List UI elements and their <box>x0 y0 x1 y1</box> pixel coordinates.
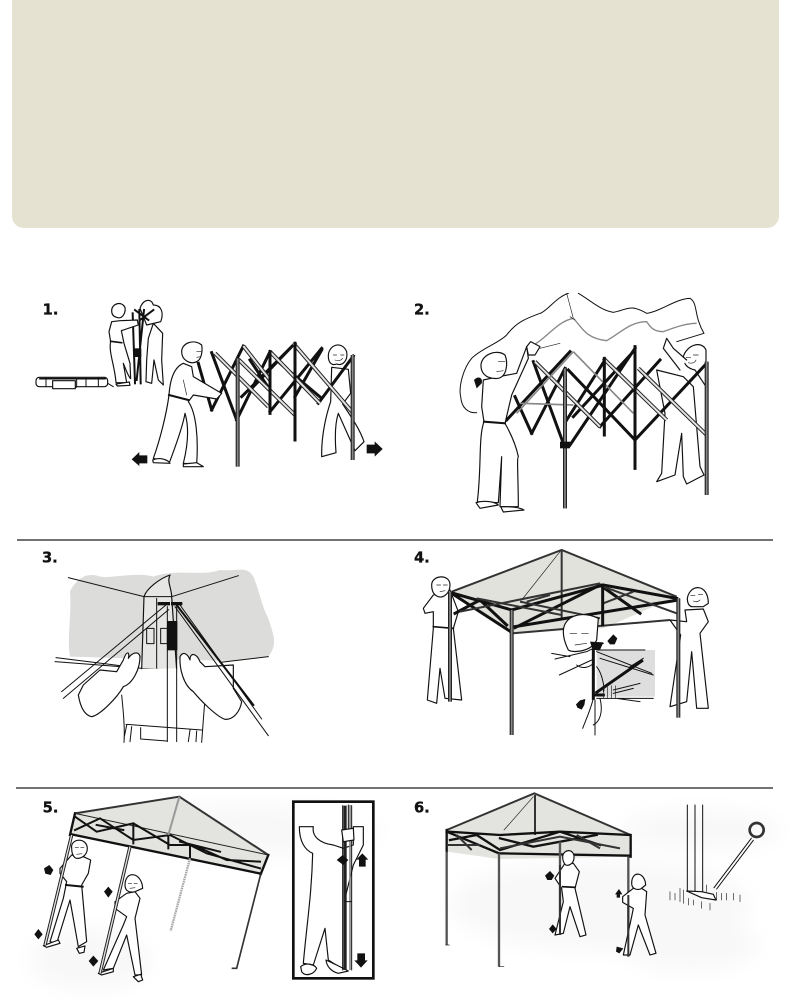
folded canopy bag <box>36 377 113 389</box>
step 1 illustration: unfolding the frame <box>36 300 383 467</box>
canopy roof <box>452 550 677 633</box>
divider between rows two and three <box>16 787 773 789</box>
right arm and hand <box>180 653 242 719</box>
man at left <box>423 577 462 703</box>
man in foreground <box>474 342 540 512</box>
woman pulling frame right <box>322 345 364 457</box>
step 4 illustration: raising canopy sides <box>414 549 708 735</box>
woman lifting middle leg <box>98 875 143 982</box>
left pole <box>45 835 72 945</box>
step number 1: 1. <box>43 302 58 319</box>
folded frame with two people <box>109 300 163 386</box>
middle pole <box>100 847 130 973</box>
expanded frame <box>450 583 678 735</box>
scissor frame <box>198 343 353 467</box>
man lifting left leg <box>43 840 91 953</box>
step 6 illustration: finishing and staking <box>414 793 764 967</box>
man pulling frame left <box>153 342 222 467</box>
right diagonal brace <box>175 605 268 736</box>
step 2 illustration: draping the canopy <box>414 293 707 512</box>
front pole overlay <box>560 865 628 957</box>
arrow to top joint <box>607 634 617 644</box>
woman at front leg <box>623 874 656 955</box>
arrow pointing left <box>132 452 147 466</box>
inset: locking detail <box>552 615 655 735</box>
grey tent backdrop <box>69 570 274 661</box>
arrow to bottom joint <box>576 699 585 710</box>
man at back leg <box>555 851 586 937</box>
step number 3: 3. <box>42 549 58 566</box>
arrows on poles <box>545 871 623 953</box>
arrow pointing right <box>367 441 383 457</box>
arrows on poles <box>34 865 113 967</box>
tent edge lines and peak <box>55 575 268 670</box>
inset: stake through footplate <box>670 805 764 910</box>
inset: extending the leg <box>293 802 373 978</box>
centre pole <box>159 604 181 742</box>
left diagonal brace <box>62 604 169 698</box>
divider between rows one and two <box>17 539 773 541</box>
canopy fabric <box>460 293 704 413</box>
canopy roof and frame <box>446 793 631 967</box>
step number 2: 2. <box>414 302 430 319</box>
left arm and hand <box>78 653 140 717</box>
step number 5: 5. <box>43 799 58 816</box>
faint paper mottling <box>30 805 780 990</box>
woman at back <box>657 338 706 484</box>
down arrow <box>354 953 368 968</box>
step number 4: 4. <box>414 549 430 566</box>
step 5 illustration: extending legs on one side <box>34 797 373 982</box>
canopy roof and frame <box>70 797 268 968</box>
header banner panel <box>12 0 779 228</box>
woman at right <box>670 588 708 708</box>
scissor frame with canopy poles <box>507 347 707 508</box>
up arrow <box>356 853 368 867</box>
person's torso and belt <box>122 668 205 742</box>
step 3 illustration: close-up of securing the centre <box>42 549 274 742</box>
step number 6: 6. <box>414 799 430 816</box>
